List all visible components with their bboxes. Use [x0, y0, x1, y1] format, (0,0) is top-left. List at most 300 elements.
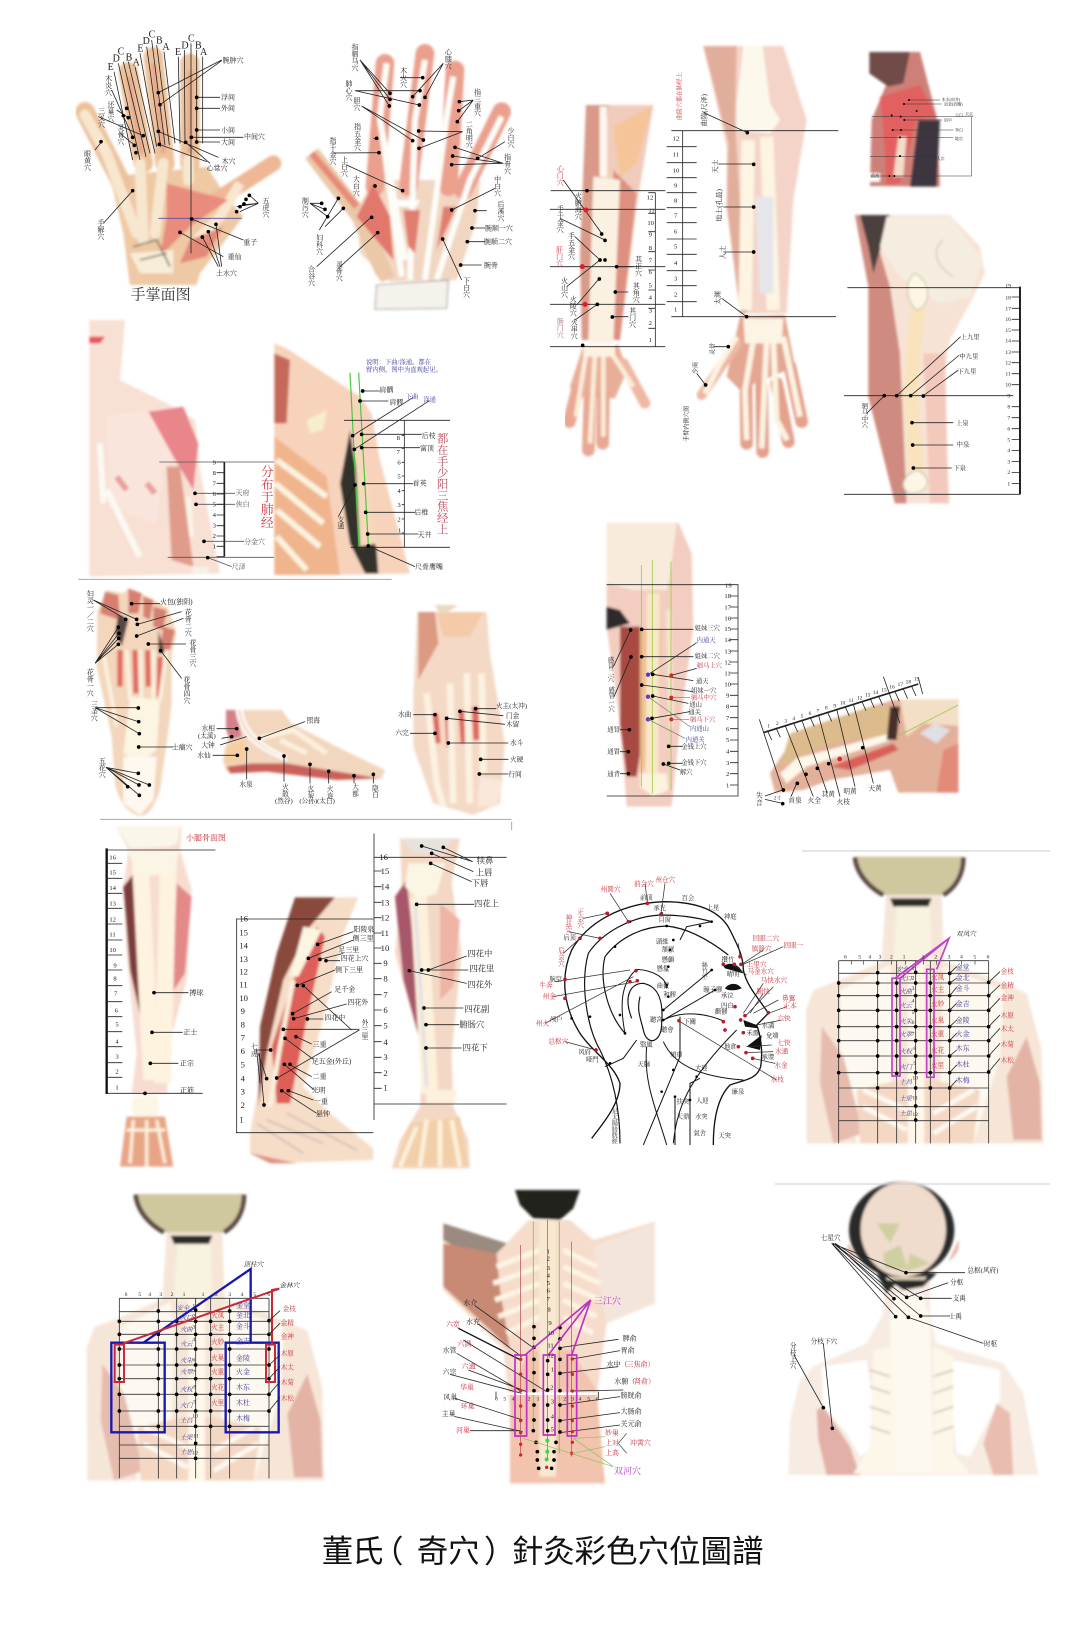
hand muscle chart lines and labels: 心膝穴 — [443, 47, 452, 70]
head chart red points and leader lines: 兌端 — [766, 1030, 779, 1039]
shoulder labels: 李白 — [955, 126, 963, 132]
thigh chart lines and labels: 中泉 — [957, 440, 970, 449]
illustration: side lower leg — [250, 897, 373, 1163]
back chart points and labels: 12 — [547, 1352, 554, 1359]
head chart red points and leader lines: 晴明 — [727, 969, 739, 978]
grid, points and labels: 土梁 — [180, 1433, 194, 1441]
lateral thigh labels: 火枝 — [837, 797, 850, 806]
thigh chart lines and labels: 6 — [1007, 427, 1010, 433]
inner thigh labels: 通关 — [688, 707, 702, 716]
grid, points and labels: 3 — [879, 954, 882, 960]
grid, points and labels: 金陵 — [236, 1354, 250, 1363]
palm chart lines and labels: 三叉穴 — [97, 107, 105, 129]
palm chart lines and labels: C — [149, 29, 156, 40]
side foot labels: 隐白 — [370, 784, 379, 800]
head chart red points and leader lines: 曲鬢 — [657, 980, 670, 989]
front forearm chart lines and labels: 10 — [673, 168, 680, 175]
back leg labels: 7 — [114, 990, 118, 997]
grid, points and labels: 11 — [912, 1095, 918, 1101]
head chart red points and leader lines: 絲竹空 — [700, 961, 707, 980]
front leg labels: 犊鼻 — [477, 855, 494, 865]
back chart points and labels: 4 — [547, 1273, 551, 1280]
thigh chart lines and labels: 18 — [1005, 295, 1011, 301]
palm chart lines and labels: E — [175, 47, 181, 58]
front forearm chart lines and labels: 手臂内侧穴图 — [682, 406, 690, 442]
head chart red points and leader lines: 廉泉 — [732, 1086, 745, 1095]
side leg labels: 3 — [241, 1086, 245, 1096]
head chart red points and leader lines: 回眼一 — [783, 941, 804, 950]
illustration: front forearm and hand — [702, 46, 807, 452]
forearm chart lines and labels: 11 — [648, 208, 655, 215]
illustration: lateral thigh — [770, 699, 958, 793]
head chart red points and leader lines: 牛奔 — [539, 980, 553, 989]
grid, points and labels: 火口 — [899, 975, 913, 983]
sole chart lines and labels: 花骨三穴 — [188, 638, 196, 668]
palm chart lines and labels: 腕肿穴 — [223, 55, 244, 64]
back chart points and labels: 1 — [537, 1397, 540, 1403]
grid, points and labels: 安全 — [177, 1304, 190, 1312]
forearm chart lines and labels: 其门穴 — [628, 306, 636, 329]
grid, points and labels: 5 — [253, 1292, 256, 1298]
grid, points and labels: 安全 — [896, 966, 909, 974]
grid, points and labels: 火金 — [236, 1367, 250, 1376]
illustration: front lower leg — [392, 838, 470, 1168]
foot top labels: 门金 — [506, 711, 520, 720]
forearm chart lines and labels: 火串穴 — [569, 317, 578, 340]
back chart points and labels: 风巢 — [443, 1392, 457, 1401]
grid, points and labels: 1 — [912, 966, 915, 972]
grid, points and labels: 火妙 — [931, 999, 945, 1008]
grid, points and labels: 金吉 — [956, 999, 970, 1008]
illustration: chest and upper arm — [89, 320, 220, 577]
grid, points and labels: 4 — [192, 1337, 195, 1343]
illustration: back forearm and hand — [569, 105, 653, 450]
side leg labels: 6 — [241, 1046, 246, 1056]
neck chart leader lines and labels — [788, 1233, 998, 1428]
grid, points and labels: 顶柱穴 — [243, 1261, 265, 1269]
grid, points and labels: 7 — [192, 1369, 195, 1375]
front leg labels: 四花副 — [464, 1004, 489, 1014]
grid, points and labels: 1 — [922, 954, 925, 960]
palm chart lines and labels: D — [113, 54, 120, 65]
inner thigh labels: 18 — [724, 593, 732, 600]
front leg labels: 13 — [381, 897, 389, 907]
neck chart leader lines and labels: 总枢(风府) — [967, 1266, 998, 1275]
side leg labels: 四花中 — [324, 1013, 345, 1022]
side arm chart lines and labels: 说明：下曲/涤通。都在 — [366, 357, 432, 366]
back chart points and labels: 9 — [548, 1320, 552, 1327]
back leg labels: 10 — [109, 947, 117, 954]
palm chart lines and labels: B — [156, 35, 163, 46]
side foot labels: 大钟 — [201, 740, 215, 749]
front forearm chart lines and labels: 6 — [674, 228, 678, 235]
back chart points and labels: 六宽 — [446, 1320, 460, 1329]
palm chart lines and labels: A — [200, 47, 208, 58]
lateral thigh labels: 7 — [817, 708, 820, 714]
head chart red points and leader lines: 頭維 — [656, 936, 669, 945]
head chart red points and leader lines: 神兹穴 — [564, 913, 572, 935]
hand muscle chart lines and labels: 中白穴 — [493, 174, 501, 197]
side arm chart lines and labels: 后枝 — [422, 431, 436, 440]
sole chart lines and labels: 火包(独阴) — [160, 597, 193, 606]
thigh chart lines and labels — [844, 284, 1020, 494]
head chart red points and leader lines: 懸顱 — [662, 955, 675, 964]
inner thigh labels: 感冒一穴 — [607, 685, 614, 713]
palm chart lines and labels: 心常穴 — [207, 164, 228, 173]
side leg labels: 8 — [241, 1019, 245, 1029]
hand muscle chart lines and labels: 少白穴 — [506, 126, 514, 149]
panel: foot charts — [85, 588, 527, 830]
forearm chart lines and labels: 10 — [647, 220, 655, 227]
back chart points and labels: 关元俞 — [621, 1419, 642, 1428]
head chart red points and leader lines: 水枝 — [771, 1075, 784, 1084]
front forearm chart lines and labels: 人士 — [718, 245, 727, 259]
back leg labels — [107, 833, 226, 1094]
side arm chart lines and labels: 都在手少阳三焦经上 — [436, 432, 448, 535]
head chart red points and leader lines: 回眼二穴 — [753, 934, 780, 943]
thigh chart lines and labels: 13 — [1005, 350, 1011, 356]
head chart red points and leader lines: 水通 — [775, 1046, 789, 1055]
arm chart lines and labels: 5 — [213, 502, 217, 509]
grid, points and labels — [839, 930, 1014, 1143]
back chart points and labels: 妙巢 — [605, 1428, 619, 1437]
hand muscle chart lines and labels: 大白穴 — [351, 174, 360, 197]
inner thigh labels: 内通天 — [697, 635, 716, 644]
sole chart lines and labels — [85, 589, 196, 795]
inner thigh labels: 驷马中穴 — [691, 692, 717, 701]
grid, points and labels: 土梁 — [899, 1095, 914, 1103]
grid, points and labels: 土昌 — [899, 1078, 913, 1086]
head chart red points and leader lines: 正会穴 — [576, 908, 584, 930]
forearm chart lines and labels: 心门穴 — [555, 164, 564, 187]
side foot labels: 火散 — [280, 782, 289, 798]
sole chart lines and labels: 五花穴 — [97, 757, 106, 779]
palm chart lines and labels: A — [133, 58, 141, 69]
grid, points and labels: 6 — [844, 954, 847, 960]
forearm chart lines and labels: 12 — [647, 194, 653, 201]
thigh chart lines and labels: 8 — [1007, 405, 1010, 411]
grid, points and labels: 火里 — [211, 1398, 225, 1407]
grid, points and labels: 10 — [192, 1414, 198, 1420]
forearm chart lines and labels: 4 — [649, 294, 653, 301]
grid, points and labels: 火权 — [899, 1047, 914, 1055]
front leg labels: 四花中 — [467, 948, 492, 958]
side leg labels: 七虎 — [249, 1042, 258, 1058]
forearm chart lines and labels: 手五金穴 — [567, 231, 575, 261]
grid, points and labels: 木太 — [281, 1362, 294, 1371]
grid, points and labels: 火朱 — [180, 1357, 193, 1365]
side leg labels: 二重 — [313, 1072, 327, 1081]
back chart points and labels: 7 — [547, 1296, 551, 1303]
grid, points and labels: 金精 — [1001, 980, 1014, 989]
grid, points and labels: 10 — [912, 1075, 918, 1081]
head chart red points and leader lines: 州金 — [543, 991, 556, 1000]
back chart points and labels: 5 — [503, 1397, 506, 1403]
front forearm chart lines and labels: 2 — [674, 292, 677, 299]
shoulder labels: 地宗 — [955, 135, 963, 141]
illustration: thigh — [855, 215, 985, 503]
grid, points and labels: 6 — [912, 1020, 915, 1026]
side leg labels: 侧下三里 — [335, 965, 363, 974]
inner thigh labels: 内通关 — [686, 735, 705, 744]
sole chart lines and labels: 三圣穴 — [89, 700, 98, 722]
front leg labels: 6 — [383, 1005, 388, 1015]
grid, points and labels: 土思 — [899, 1109, 913, 1117]
hand muscle chart lines and labels: 指三重穴 — [473, 87, 481, 117]
back chart points and labels: 水腑（ — [614, 1376, 635, 1385]
head chart red points and leader lines: 人迎 — [696, 1096, 709, 1105]
side foot labels: 火连 — [325, 784, 333, 800]
hand muscle chart lines and labels: 二角明穴 — [464, 120, 473, 149]
grid, points and labels: 火权 — [180, 1386, 194, 1394]
head chart red points and leader lines: 后会穴 — [556, 946, 565, 968]
inner thigh labels: 金钱上穴 — [681, 741, 707, 750]
side foot labels: 水相 — [202, 724, 215, 733]
sole chart lines and labels: 花骨一穴 — [85, 667, 94, 697]
title: 董氏（奇穴）針灸彩色穴位圖譜 — [322, 1533, 764, 1569]
side leg labels: 侧三里 — [353, 934, 374, 943]
side foot labels: (然谷) — [275, 796, 293, 805]
grid, points and labels: 双凤穴 — [956, 930, 977, 938]
foot top labels — [100, 701, 527, 830]
head chart red points and leader lines: 大迎 — [695, 1063, 708, 1072]
back leg labels: 3 — [115, 1054, 119, 1061]
inner thigh labels: 通山 — [689, 699, 702, 708]
back leg labels: 2 — [115, 1068, 119, 1075]
head chart red points and leader lines: 攢竹 — [722, 955, 735, 964]
back chart points and labels: 6 — [596, 1397, 599, 1403]
back chart points and labels: 6 — [547, 1288, 551, 1295]
head chart red points and leader lines: 禾髎 — [747, 1028, 760, 1037]
sole chart lines and labels: 妇灵一／二穴 — [85, 589, 94, 633]
head chart red points and leader lines: 地倉 — [724, 1041, 737, 1050]
back chart points and labels: 水介 — [463, 1298, 477, 1307]
head chart red points and leader lines: 风府 — [578, 1047, 592, 1056]
front forearm chart lines and labels: 曲陵穴都在肺经上 — [676, 72, 684, 120]
inner thigh labels: 6 — [726, 726, 730, 733]
grid, points and labels: 火门 — [899, 1063, 913, 1071]
side foot labels — [197, 715, 379, 805]
grid, points and labels: 3 — [912, 986, 915, 992]
grid, points and labels: 木梅 — [236, 1414, 250, 1423]
palm chart lines and labels: D — [181, 40, 189, 51]
panel: head point chart — [536, 875, 804, 1146]
grid, points and labels: 4 — [148, 1292, 151, 1298]
grid, points and labels: 5 — [973, 954, 976, 960]
back chart points and labels: 上对 — [605, 1438, 619, 1447]
lateral thigh labels: 17 — [898, 682, 903, 688]
side arm chart lines and labels: 支通 — [336, 515, 344, 531]
palm chart lines and labels: A — [162, 42, 170, 53]
thigh chart lines and labels: 2 — [1007, 470, 1010, 476]
grid, points and labels: 金堂 — [956, 962, 970, 971]
side leg labels: 7 — [241, 1033, 246, 1043]
head chart red points and leader lines: 马快水穴 — [761, 975, 788, 984]
palm chart lines and labels: B — [126, 53, 133, 64]
illustration: hand muscle view — [312, 53, 502, 309]
lateral thigh labels: 1 — [767, 723, 770, 729]
side arm chart lines and labels: 2 — [397, 516, 401, 523]
lateral thigh labels: 5 — [801, 713, 804, 719]
lateral thigh labels: 8 — [825, 706, 828, 712]
front forearm chart lines and labels: 曲陵(尺泽) — [700, 93, 709, 127]
illustration: foot side view — [223, 710, 385, 780]
head chart red points and leader lines: 正本 — [783, 1001, 797, 1010]
arm chart lines and labels: 1 — [213, 543, 216, 550]
illustration: shoulder — [869, 52, 940, 187]
grid, points and labels: 2 — [192, 1314, 195, 1320]
side foot labels: 火菊 — [306, 784, 314, 799]
inner thigh labels: 14 — [724, 637, 732, 644]
hand muscle chart lines and labels: 上白穴 — [340, 155, 348, 178]
hand muscle chart lines and labels: 灵骨穴 — [334, 259, 343, 282]
head chart red points and leader lines: 聽宮 — [650, 1015, 663, 1024]
hand muscle chart lines and labels: 腕顺一穴 — [485, 223, 513, 232]
grid, points and labels: 金枝 — [1001, 966, 1014, 975]
side arm chart lines and labels: 肩髎 — [389, 398, 403, 407]
illustration: side torso and arm — [274, 343, 410, 575]
side leg labels: 10 — [239, 993, 248, 1003]
head chart red points and leader lines: 上星 — [707, 902, 720, 911]
side arm chart lines and labels: 臂内侧，图中为直观起见。 — [366, 364, 442, 373]
sole chart lines and labels: 花骨二穴 — [183, 607, 192, 637]
grid, points and labels: 5 — [912, 1010, 915, 1016]
shoulder labels: 曲池 — [871, 172, 880, 179]
side foot labels: (公孙)(太白) — [299, 796, 335, 805]
grid, points and labels: 木东 — [236, 1382, 250, 1391]
side leg labels — [236, 914, 374, 1133]
head chart red points and leader lines: 前顶 — [640, 892, 653, 901]
side arm chart lines and labels: 5 — [397, 473, 401, 480]
side leg labels: 5 — [241, 1060, 245, 1070]
side leg labels: 9 — [241, 1006, 245, 1016]
back chart points and labels: 冲霄穴 — [630, 1438, 651, 1447]
neck chart leader lines and labels: 分枝下穴 — [811, 1336, 838, 1345]
inner thigh labels: 17 — [724, 604, 732, 611]
side leg labels: 1 — [239, 1115, 244, 1125]
back leg labels: 12 — [109, 916, 116, 923]
thigh chart lines and labels: 5 — [1007, 437, 1010, 443]
foot top labels: 六完 — [395, 728, 409, 737]
side leg labels: 悬钟 — [316, 1109, 330, 1118]
grid, points and labels: 4 — [912, 999, 915, 1005]
side leg labels: 一重 — [314, 1096, 328, 1105]
head chart red points and leader lines: 颧髎 — [715, 1006, 728, 1015]
neck chart leader lines and labels: 分枝上穴 — [788, 1341, 796, 1370]
grid, points and labels: 木菊 — [1001, 1040, 1014, 1049]
forearm chart lines and labels: 火山穴 — [560, 276, 568, 299]
grid, points and labels: 5 — [858, 954, 861, 960]
back leg labels: 正士 — [183, 1028, 197, 1037]
grid, points and labels: 土昌 — [180, 1417, 193, 1425]
thigh chart lines and labels: 下九里 — [957, 366, 977, 375]
head chart red points and leader lines: 水金 — [774, 1060, 788, 1069]
grid, points and labels: 金斗 — [956, 984, 970, 993]
grid, points and labels: 2 — [171, 1292, 174, 1298]
front leg labels: 10 — [381, 943, 389, 953]
hand muscle chart lines and labels: 肺心穴 — [344, 79, 352, 102]
forearm chart lines and labels: 肝门穴 — [555, 245, 563, 268]
grid, points and labels: 木杜 — [236, 1398, 250, 1407]
inner thigh labels: 感冒二穴 — [606, 655, 614, 683]
head chart red points and leader lines: 后顶 — [563, 932, 577, 941]
thigh chart lines and labels: 上泉 — [956, 418, 969, 427]
side leg labels: 14 — [239, 940, 249, 950]
back leg labels: 1 — [115, 1084, 119, 1091]
grid, points and labels: 火门 — [180, 1401, 193, 1409]
back chart points and labels: 4 — [551, 1413, 555, 1420]
inner thigh labels: 金钱下穴 — [681, 758, 707, 767]
grid, points and labels: 2 — [912, 975, 915, 981]
lateral thigh labels: 明黄 — [843, 786, 857, 795]
neck chart leader lines and labels: 支禹 — [953, 1294, 966, 1303]
head chart red points and leader lines: 州圆穴 — [601, 885, 621, 894]
back leg labels: 5 — [115, 1022, 119, 1029]
grid, points and labels: 3 — [948, 954, 951, 960]
palm chart lines and labels: 小间 — [221, 126, 235, 135]
shoulder labels: 木水(肩井) — [942, 96, 961, 102]
palm chart lines and labels: C — [118, 46, 125, 57]
hand muscle chart lines and labels: 胆穴 — [352, 96, 360, 112]
back chart points and labels: 5 — [587, 1397, 590, 1403]
lateral thigh labels: 首泉 — [788, 796, 802, 805]
hand muscle chart lines and labels: 指骨穴 — [503, 152, 511, 175]
back leg labels: 正筋 — [180, 1085, 194, 1094]
grid, points and labels: 1 — [192, 1304, 195, 1310]
inner thigh labels: 姐妹二穴 — [695, 651, 721, 660]
front leg labels: 14 — [381, 882, 390, 892]
hand muscle chart lines and labels: 后溪穴 — [496, 199, 504, 222]
front forearm chart lines and labels: 太渊 — [713, 291, 722, 305]
forearm chart lines and labels: 火腑海穴 — [573, 191, 582, 221]
grid, points and labels: 金神 — [281, 1331, 294, 1340]
back leg labels: 14 — [109, 885, 117, 892]
forearm chart lines and labels: 3 — [649, 308, 653, 315]
head chart red points and leader lines: 总枢穴 — [548, 1037, 569, 1046]
back chart points and labels: 上高 — [605, 1448, 619, 1457]
inner thigh labels: 16 — [724, 615, 732, 622]
back chart points and labels: 3 — [547, 1265, 551, 1272]
back chart points and labels: 胃俞 — [621, 1345, 635, 1354]
grid, points and labels: 7 — [912, 1031, 915, 1037]
lateral thigh labels: 14 — [873, 690, 879, 696]
lateral thigh labels: 18 — [906, 679, 911, 685]
back leg labels: 13 — [109, 900, 117, 907]
sole chart lines and labels: 花骨四穴 — [182, 675, 190, 705]
side arm chart lines and labels: 6 — [397, 460, 401, 467]
back chart points and labels: 3 — [551, 1398, 555, 1405]
front leg labels: 16 — [379, 852, 389, 862]
side arm chart lines and labels: 富顶 — [420, 443, 435, 452]
grid, points and labels: 木原 — [281, 1349, 294, 1358]
back chart points and labels: 双河穴 — [614, 1465, 641, 1476]
grid, points and labels: 火曲 — [899, 987, 913, 995]
thigh chart lines and labels: 12 — [1005, 361, 1011, 367]
grid, points and labels — [111, 1261, 301, 1478]
grid, points and labels: 火花 — [931, 1046, 945, 1055]
front forearm chart lines and labels: 天士 — [710, 159, 719, 173]
side leg labels: 外三里 — [360, 1018, 368, 1040]
side leg labels: 12 — [239, 967, 248, 977]
grid, points and labels: 木原 — [1001, 1010, 1014, 1019]
hand muscle chart lines and labels: 腕骨 — [484, 260, 498, 269]
side leg labels: 2 — [241, 1100, 245, 1110]
palm chart lines and labels: 木穴 — [222, 156, 236, 165]
inner thigh labels: 8 — [726, 704, 730, 711]
forearm chart lines and labels: 其正穴 — [634, 254, 642, 277]
back chart points and labels: 1 — [551, 1367, 554, 1374]
shoulder labels — [870, 96, 973, 179]
